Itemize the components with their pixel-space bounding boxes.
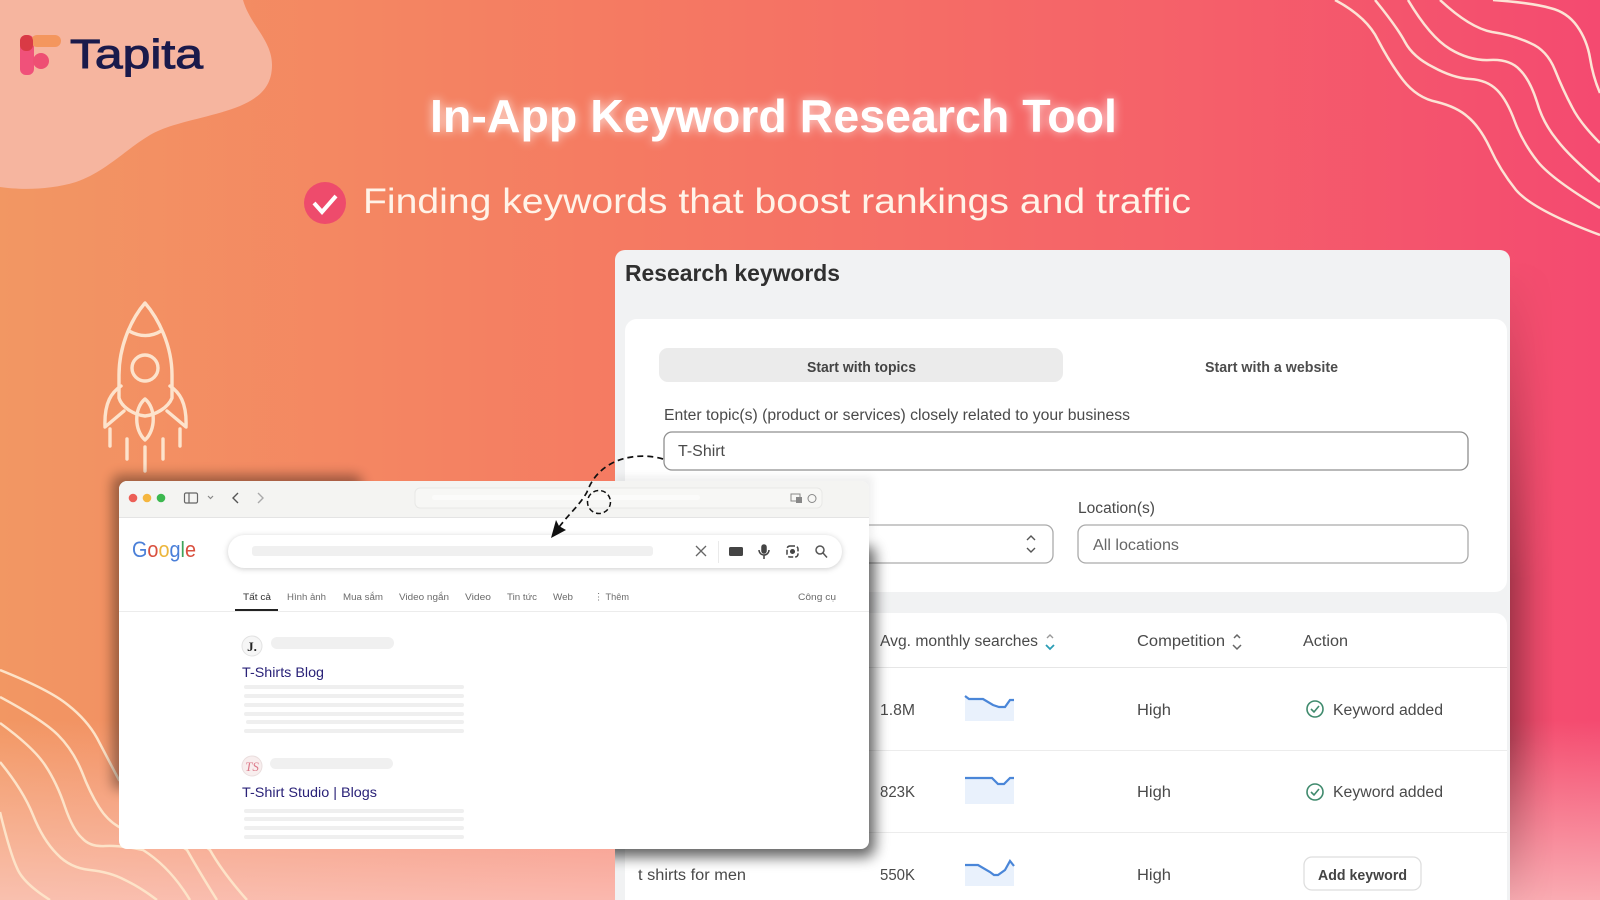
search result 1 bbox=[242, 636, 464, 733]
website tab: Start with a website bbox=[1205, 360, 1338, 376]
result tabs: Tất cả bbox=[243, 592, 272, 603]
result tabs: Video ngắn bbox=[399, 592, 449, 603]
icon: search bbox=[816, 546, 827, 558]
decorative waves top right bbox=[1335, 0, 1600, 235]
google logo: Google bbox=[132, 537, 196, 562]
result tabs: Công cụ bbox=[798, 592, 836, 603]
decorative waves bottom left bbox=[0, 670, 247, 900]
topic input bbox=[664, 432, 1468, 470]
browser shadow on background bbox=[112, 475, 362, 790]
icon: keyboard bbox=[729, 547, 743, 556]
logo blob bbox=[0, 0, 272, 189]
topic label: Enter topic(s) (product or services) closely related to your business bbox=[664, 407, 1130, 424]
icon: rocket bbox=[105, 303, 186, 471]
browser top shadow on panel bbox=[615, 476, 873, 536]
right shadow of app panel bbox=[1510, 294, 1548, 898]
table header bbox=[880, 633, 1348, 650]
site icon bbox=[242, 756, 262, 776]
selected tab: Start with topics bbox=[807, 360, 916, 376]
result tabs: Mua sắm bbox=[343, 592, 383, 603]
logo wordmark: Tapita bbox=[70, 31, 203, 77]
add keyword button: Add keyword bbox=[1318, 868, 1407, 884]
site icon: TS bbox=[245, 759, 259, 774]
language select bbox=[600, 525, 1053, 563]
sparkline bbox=[965, 696, 1014, 721]
result title: T-Shirt Studio | Blogs bbox=[242, 784, 377, 800]
panel: keyword table bbox=[625, 613, 1507, 900]
browser shadow on panel bbox=[600, 545, 875, 857]
row 2: Keyword added bbox=[1333, 784, 1443, 801]
sparkline bbox=[965, 778, 1014, 804]
row 3: 550K bbox=[880, 867, 916, 884]
location select bbox=[1078, 525, 1468, 563]
table header: Action bbox=[1303, 633, 1348, 650]
title: In-App Keyword Research Tool bbox=[430, 90, 1117, 142]
icon: check badge bbox=[304, 182, 346, 224]
panel: topic form card bbox=[600, 319, 1507, 592]
logo mark bbox=[20, 35, 61, 75]
result tabs: ⋮ Thêm bbox=[594, 592, 629, 603]
table header: Competition bbox=[1137, 633, 1225, 650]
window controls bbox=[129, 494, 165, 502]
result tabs: Web bbox=[553, 592, 573, 603]
row 1: High bbox=[1137, 702, 1171, 719]
site icon: J. bbox=[247, 639, 257, 654]
search bar bbox=[228, 535, 842, 568]
row 1 bbox=[880, 696, 1443, 721]
sparkline bbox=[965, 861, 1014, 886]
result tabs: Video bbox=[465, 592, 491, 603]
topic input: T-Shirt bbox=[678, 443, 726, 460]
icon: lens bbox=[787, 546, 798, 557]
result tabs: Tin tức bbox=[507, 592, 537, 603]
result tabs bbox=[119, 592, 869, 612]
icon: added check bbox=[1307, 701, 1323, 717]
row 2: High bbox=[1137, 784, 1171, 801]
icon: microphone bbox=[759, 545, 769, 559]
result title: T-Shirts Blog bbox=[242, 664, 324, 680]
table header: Avg. monthly searches bbox=[880, 633, 1038, 650]
subtitle: Finding keywords that boost rankings and traffic bbox=[363, 182, 1191, 221]
row 1: Keyword added bbox=[1333, 702, 1443, 719]
row 2: 823K bbox=[880, 784, 916, 801]
panel: research keywords app bbox=[600, 250, 1510, 900]
icon: added check bbox=[1307, 784, 1323, 800]
nav arrows bbox=[233, 493, 263, 503]
row 3: t shirts for men bbox=[638, 867, 746, 884]
search result 2 bbox=[242, 756, 464, 839]
location select: All locations bbox=[1093, 537, 1179, 554]
row 3 bbox=[638, 857, 1421, 890]
row 2 bbox=[880, 778, 1443, 804]
heading: Research keywords bbox=[625, 260, 840, 286]
dashed arrow from input to search bar bbox=[551, 456, 663, 538]
row 3: High bbox=[1137, 867, 1171, 884]
result tabs: Hình ảnh bbox=[287, 592, 326, 603]
logo bbox=[20, 31, 203, 77]
location label: Location(s) bbox=[1078, 500, 1155, 517]
selected tab bbox=[659, 348, 1063, 382]
address bar bbox=[415, 488, 822, 508]
add keyword button bbox=[1304, 857, 1421, 890]
row 1: 1.8M bbox=[880, 702, 915, 719]
sidebar icon bbox=[184, 493, 213, 503]
site icon bbox=[242, 636, 262, 656]
browser window bbox=[119, 481, 869, 849]
browser toolbar bbox=[119, 481, 869, 518]
